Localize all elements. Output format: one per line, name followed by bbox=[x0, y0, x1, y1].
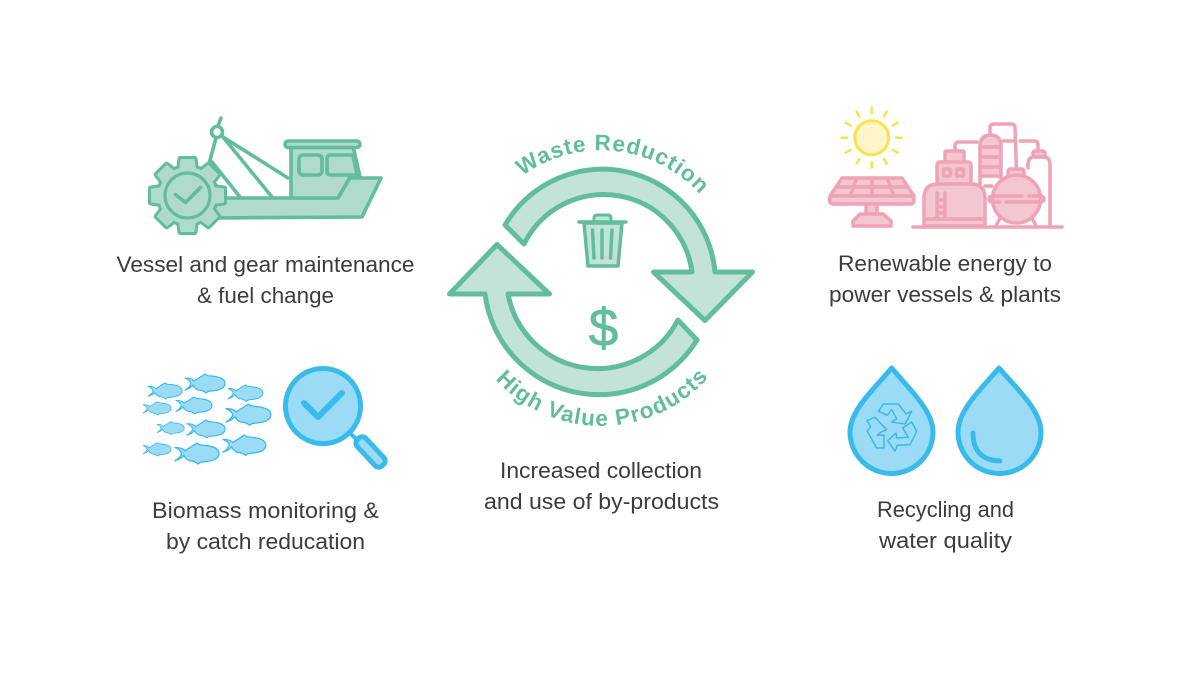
label: recycling and water quality bbox=[877, 497, 1014, 553]
icon: dollar sign: $ bbox=[589, 299, 618, 358]
label: by-products: and use of by-products bbox=[484, 489, 719, 514]
icon: sun bbox=[842, 108, 902, 168]
label: vessel and gear: & fuel change bbox=[197, 283, 334, 308]
label: biomass monitoring bbox=[152, 498, 379, 554]
label: renewable energy bbox=[829, 251, 1061, 307]
icon: school of fish bbox=[143, 374, 271, 464]
boat rigging bbox=[209, 118, 288, 197]
icon: trash can bbox=[579, 215, 626, 266]
label: biomass monitoring: Biomass monitoring & bbox=[152, 498, 379, 523]
icon: magnifying glass with check bbox=[286, 368, 387, 469]
label: recycling and water quality: water quality bbox=[878, 528, 1013, 553]
icon: water drop with recycling symbol bbox=[850, 368, 933, 473]
label: recycling and water quality: Recycling and bbox=[877, 497, 1014, 522]
curved heading: Waste Reduction: Waste Reduction bbox=[514, 134, 706, 194]
label: vessel and gear: Vessel and gear maintenance bbox=[116, 252, 414, 277]
icon: solar panel and sun with plant bbox=[830, 108, 1062, 227]
label: renewable energy: Renewable energy to bbox=[838, 251, 1052, 276]
top cycle arrow bbox=[505, 169, 752, 320]
label: biomass monitoring: by catch reducation bbox=[166, 529, 365, 554]
icon: maintenance gear bbox=[151, 159, 224, 232]
label: by-products: Increased collection bbox=[500, 458, 702, 483]
bottom cycle arrow bbox=[450, 244, 697, 395]
label: vessel and gear bbox=[116, 252, 414, 308]
boat hull bbox=[213, 178, 381, 218]
icon: recycling arrows bbox=[867, 404, 917, 451]
label: renewable energy: power vessels & plants bbox=[829, 282, 1061, 307]
icon: processing plant bbox=[913, 124, 1062, 227]
icon: water drop bbox=[958, 368, 1041, 474]
boat cabin bbox=[285, 141, 360, 198]
curved heading: High Value Products: High Value Products bbox=[496, 370, 706, 426]
label: by-products bbox=[484, 458, 719, 514]
icon: solar panel bbox=[830, 178, 914, 226]
icon: fishing boat with gear bbox=[151, 118, 381, 232]
